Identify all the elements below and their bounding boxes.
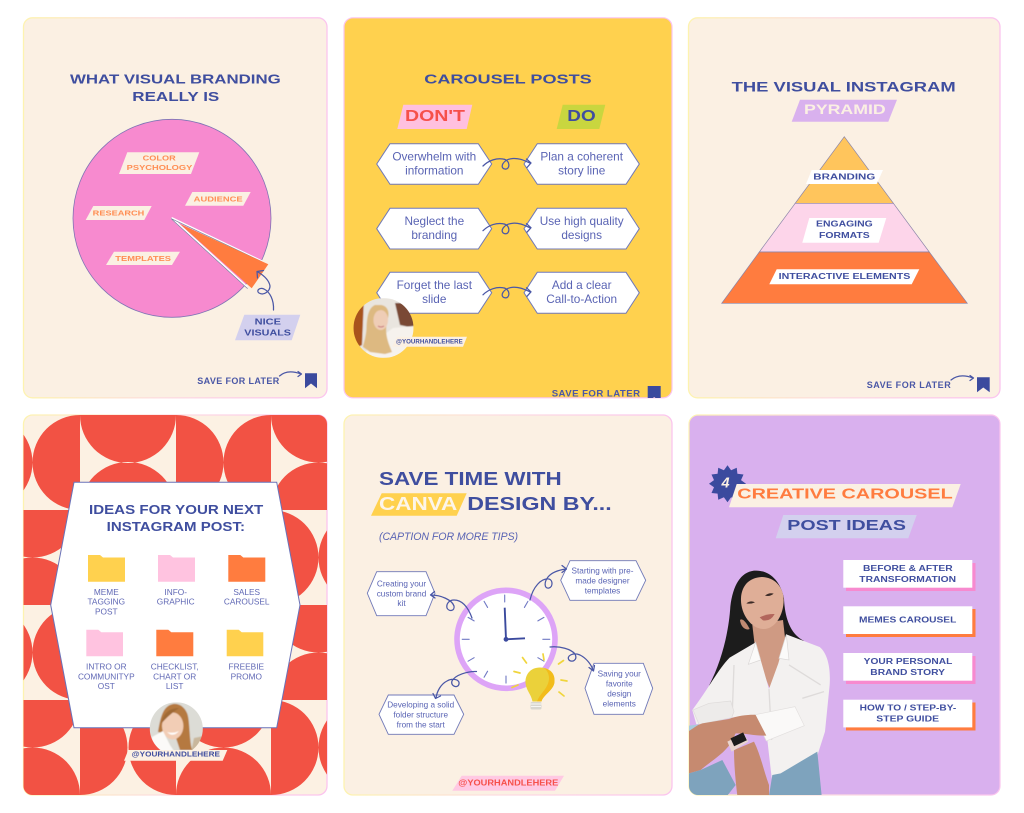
callout: folder structure [379,695,464,734]
heading: CAROUSEL POSTS [424,71,592,86]
save for later: SAVE FOR LATER [197,376,280,386]
don't tag: DON'T [405,108,465,125]
pie chart [73,119,271,317]
folder captions: MEME [94,587,119,597]
row 3: Call-to-Action [546,292,617,306]
row 1: Plan a coherent [540,149,624,163]
card: before and after: TRANSFORMATION [859,575,956,584]
handle label: @YOURHANDLEHERE [396,340,463,346]
panel: creative carousel post ideas [689,415,1000,796]
heading band 1: CREATIVE CAROUSEL [737,487,953,503]
card: before and after [843,560,976,591]
label: nice visuals: NICE [255,316,281,326]
panel: the visual instagram pyramid [688,18,1000,398]
photo: seated woman [689,571,830,796]
card: how to guide: HOW TO / STEP-BY- [860,703,957,712]
folder captions: CHART OR [153,671,196,681]
heading band 2 [776,515,917,538]
save for later [552,386,661,398]
row 3: slide [422,292,447,306]
label: nice visuals [235,315,300,340]
folder captions: CHECKLIST, [151,662,199,672]
heading band 1 [729,484,961,507]
label: engaging formats: FORMATS [819,231,871,240]
handle label [124,750,227,761]
do tag [557,105,605,129]
heading [89,503,264,534]
folder captions: GRAPHIC [157,597,195,607]
heading: THE VISUAL INSTAGRAM [732,79,956,95]
folder captions: TAGGING [87,597,125,607]
label: audience [185,192,251,206]
callout: folder structure: Developing a solid [387,700,455,710]
heading: REALLY IS [132,89,220,104]
label: audience: AUDIENCE [194,194,243,204]
card: personal brand story [843,653,976,684]
row 3: Add a clear [552,278,612,292]
card: memes carousel [843,606,976,637]
pyramid tag: PYRAMID [804,101,886,117]
icon: starburst [709,465,746,502]
caption note: (CAPTION FOR MORE TIPS) [379,531,518,543]
white hexagon card [51,482,300,728]
pyramid chart [722,137,967,303]
folder captions: OST [98,681,115,691]
label: color psychology: COLOR [143,154,176,162]
handle tag [452,776,564,791]
card: personal brand story: BRAND STORY [870,668,946,677]
handle label [392,337,467,347]
curly arrows [430,566,594,698]
save for later [197,372,317,388]
label: interactive elements [769,269,919,284]
folder captions: LIST [166,681,183,691]
heading: CANVA [379,494,457,514]
label: branding [806,170,883,184]
label: nice visuals: VISUALS [244,328,291,338]
callout: pre-made templates: Starting with pre- [572,566,634,576]
label: color psychology [119,152,199,174]
heading: IDEAS FOR YOUR NEXT [89,503,264,517]
callout: favorite elements: Saving your [598,670,641,678]
arrow: curl to wedge [257,270,274,310]
row 1: information [405,164,463,178]
callout: pre-made templates: made designer [575,576,630,586]
avatar photo [150,702,203,750]
icon: light bulb [512,654,567,710]
panel: what visual branding really is [24,18,327,398]
callout: brand kit [367,572,435,616]
label: interactive elements: INTERACTIVE ELEMENTS [779,272,911,281]
panel: save time with canva [344,415,672,795]
avatar photo [353,298,414,358]
panel background [24,415,327,795]
folder captions [78,587,270,691]
row 1: Overwhelm with [392,149,476,163]
callout: pre-made templates: templates [585,586,620,596]
handle tag: @YOURHANDLEHERE [458,779,559,788]
callout: favorite elements: design [607,690,632,698]
folder captions: INTRO OR [86,662,127,672]
heading [70,71,281,104]
label: branding: BRANDING [813,172,875,181]
card: how to guide: STEP GUIDE [876,714,940,723]
card: memes carousel: MEMES CAROUSEL [859,615,956,624]
heading: INSTAGRAM POST: [107,520,245,534]
heading: WHAT VISUAL BRANDING [70,71,281,86]
row 3: Forget the last [397,278,473,292]
folder captions: POST [95,606,118,616]
folder captions: PROMO [231,671,263,681]
folder captions: COMMUNITYP [78,671,135,681]
clock [457,590,555,688]
label: templates [106,252,180,265]
heading: DESIGN BY... [467,494,612,514]
folder captions: SALES [233,587,261,597]
panel background [688,18,1000,398]
label: engaging formats [802,218,886,243]
label: color psychology: PSYCHOLOGY [127,163,192,172]
label: research: RESEARCH [93,208,144,217]
handle label: @YOURHANDLEHERE [132,752,220,758]
geometric red pattern [24,415,327,795]
callout: folder structure: from the start [397,720,446,730]
save for later: SAVE FOR LATER [867,380,951,390]
row 2 [377,208,639,249]
folder captions: INFO- [164,587,187,597]
folder captions: CAROUSEL [224,597,270,607]
heading band 2: POST IDEAS [787,518,907,534]
panel: ideas for your next instagram post [22,414,328,796]
star number: 4 [720,476,730,492]
label: engaging formats: ENGAGING [816,220,873,229]
panel: carousel posts [344,18,672,402]
folder grid [86,555,265,656]
row 1: story line [558,164,606,178]
callout: brand kit: kit [397,599,406,608]
folder captions: FREEBIE [229,662,265,672]
row 2: Neglect the [404,214,465,228]
callout: brand kit: custom brand [377,589,427,598]
card: before and after: BEFORE & AFTER [863,564,953,573]
card: how to guide [843,700,976,730]
pyramid tag [792,100,897,122]
save for later [867,376,990,392]
heading [371,469,612,516]
callout: favorite elements [585,663,653,714]
row 2: designs [561,228,602,242]
callout: brand kit: Creating your [377,580,426,588]
save for later: SAVE FOR LATER [552,389,640,400]
heading: SAVE TIME WITH [379,469,562,489]
panel background [24,18,327,398]
do tag: DO [567,108,596,125]
panel background [344,415,672,795]
row 2: Use high quality [540,214,624,228]
callout: folder structure: folder structure [393,710,448,720]
panel background [344,18,672,398]
don't tag [397,105,472,129]
label: research [86,206,152,220]
callout: favorite elements: favorite [606,680,633,688]
row 1 [377,144,639,184]
card: personal brand story: YOUR PERSONAL [864,657,952,666]
label: templates: TEMPLATES [115,254,171,263]
callout: pre-made templates [561,561,646,600]
callout: favorite elements: elements [603,700,636,708]
row 3 [377,272,639,313]
panel background [689,415,1000,795]
row 2: branding [411,228,457,242]
